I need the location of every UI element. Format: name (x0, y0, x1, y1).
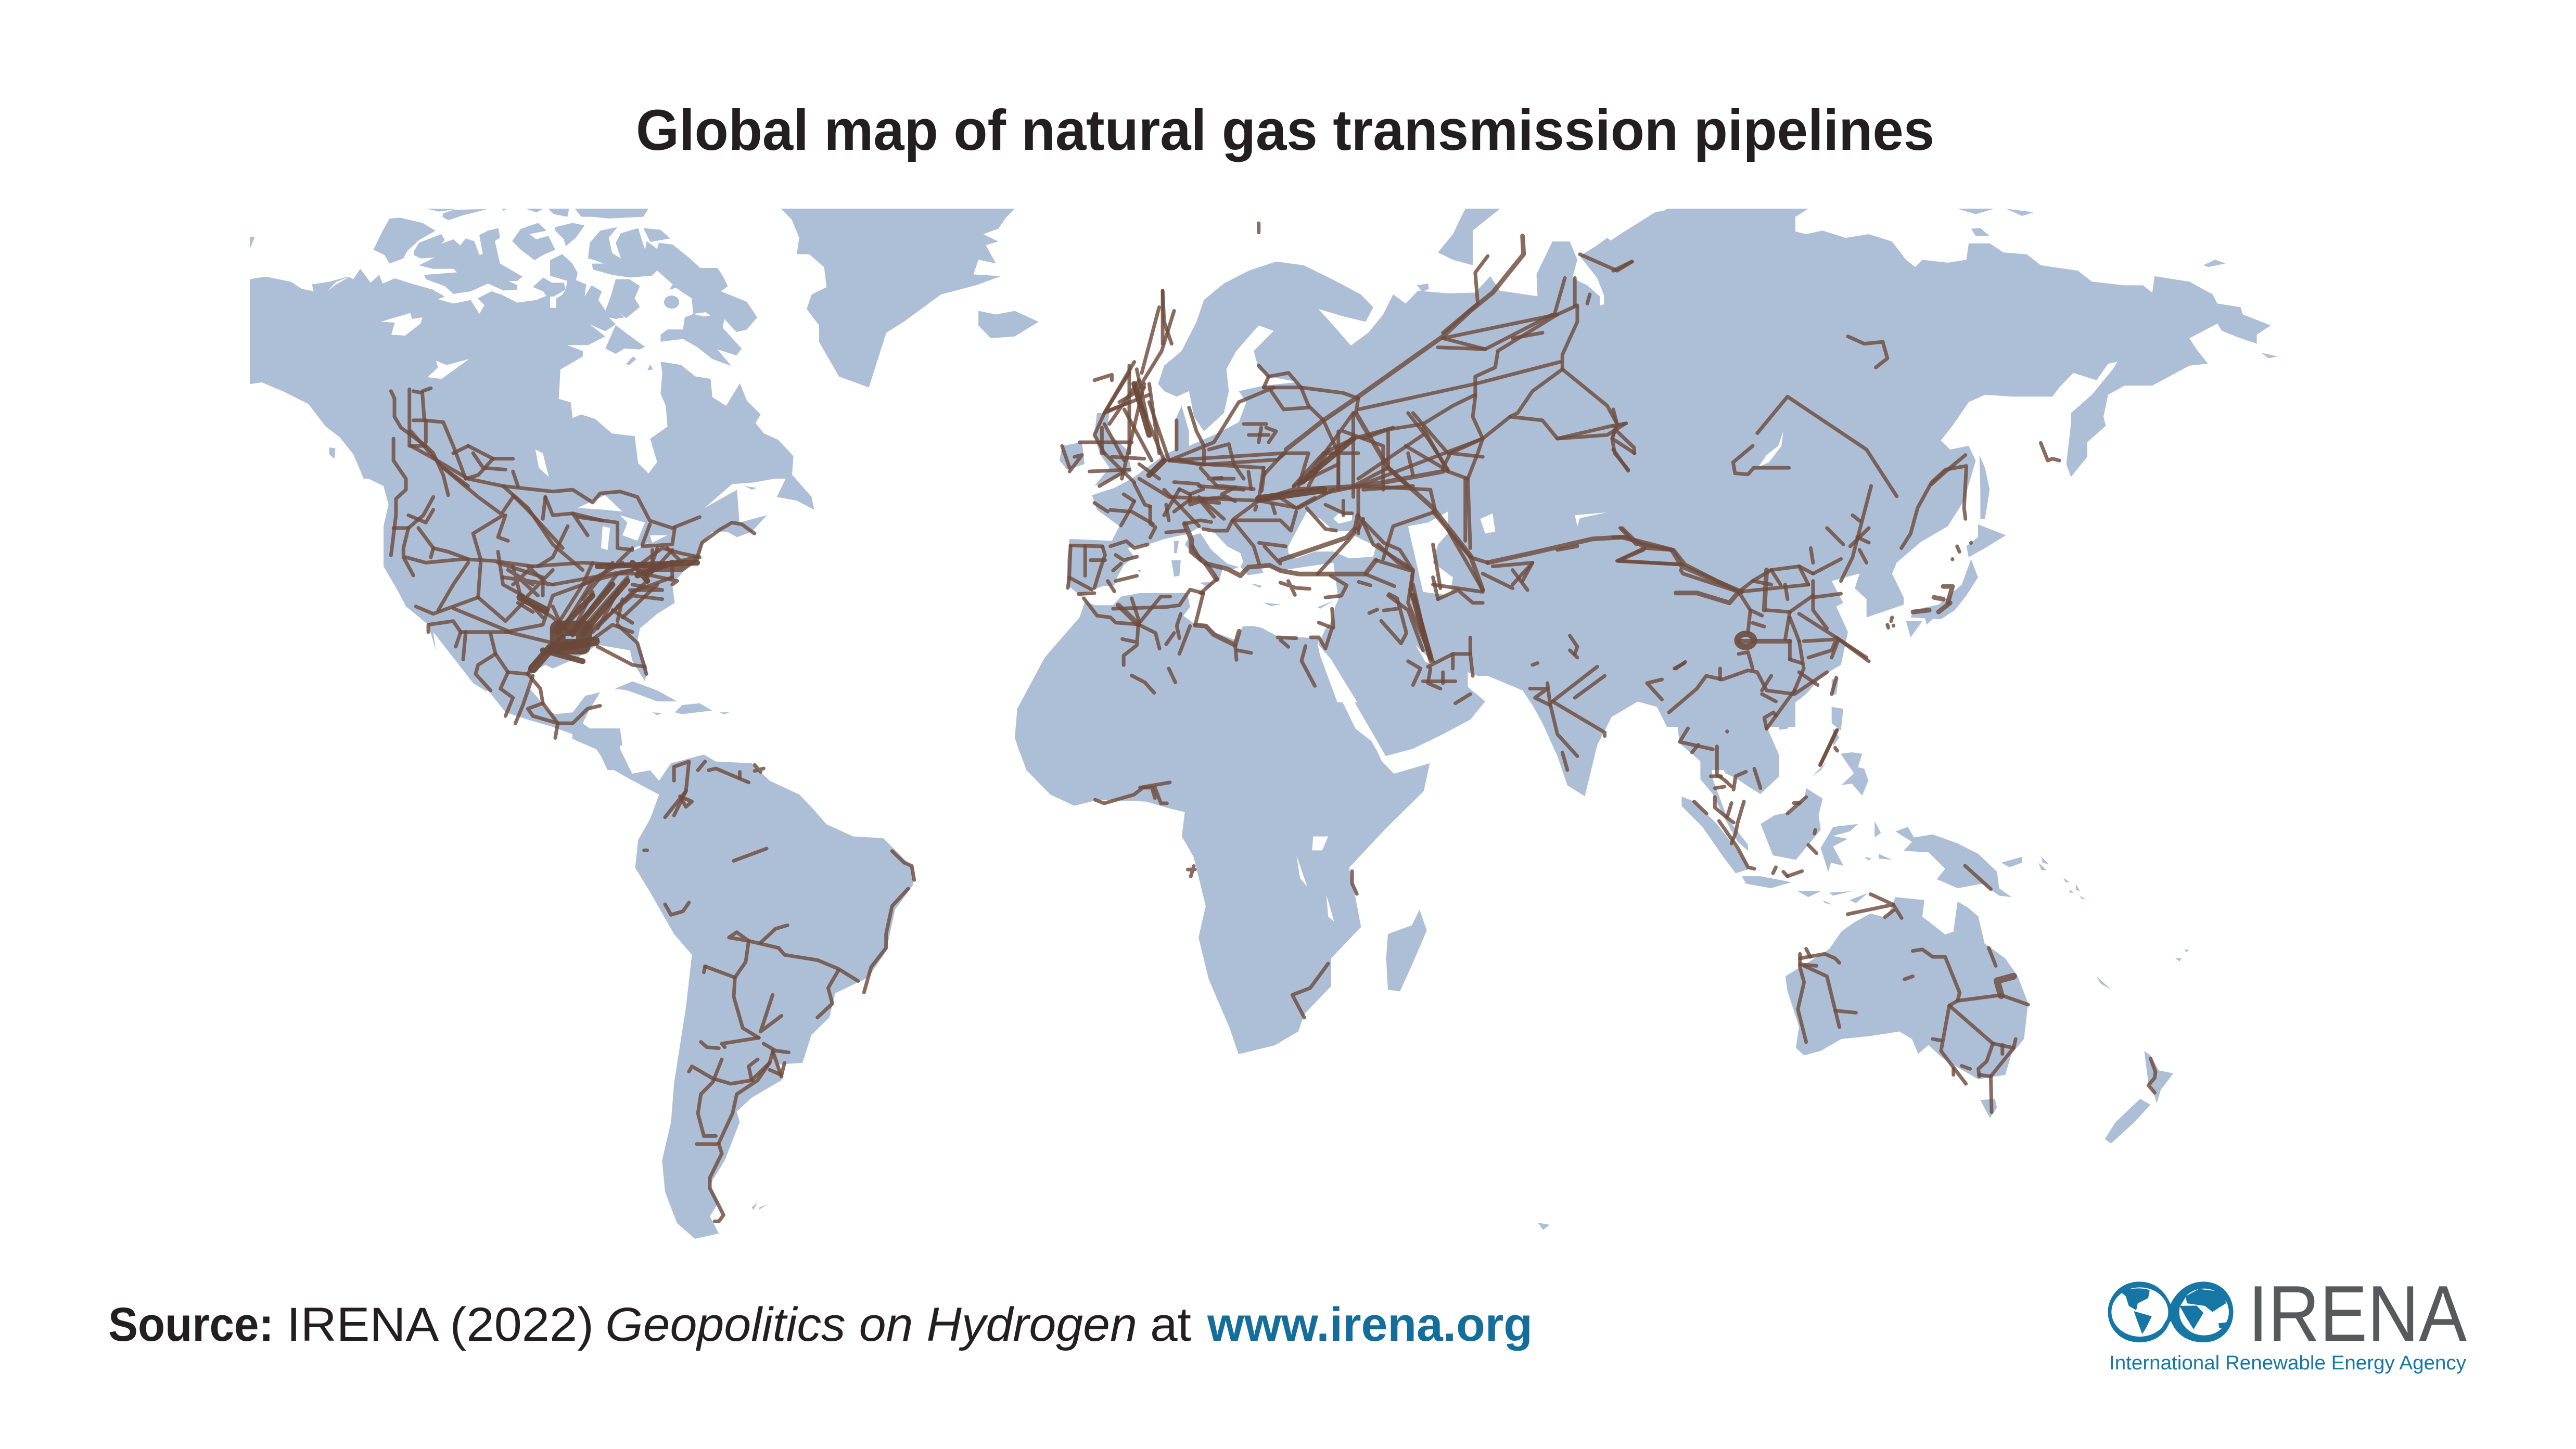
land: Italy, Sicily, Sardinia, Corsica, Crete, Cyprus (1138, 533, 1333, 609)
citation author: IRENA (2022) (287, 1298, 594, 1351)
pipelines: Iberia, France, Italy, Balkans, Turkey, North Africa, Levant (1068, 453, 1413, 693)
website link: www.irena.org (1207, 1298, 1533, 1351)
pipelines: South-East Asia and Oceania (1680, 728, 2156, 1112)
icon: infinity globe emblem (2108, 1281, 2234, 1342)
seas and lakes: Canada (327, 258, 469, 379)
citation at: at (1150, 1298, 1191, 1351)
land: southern North America and Greenland (361, 209, 1039, 770)
seas and lakes: Caspian, Aral, Balkhash, Persian Gulf (1386, 511, 1607, 767)
pipelines: South America and Sub-Saharan Africa (644, 762, 1357, 1221)
land: South Sandwich islet (1538, 1223, 1550, 1230)
seas and lakes: USA and Gulf of California (433, 450, 667, 698)
title: Global map of natural gas transmission pipelines (636, 98, 1934, 162)
citation title: Geopolitics on Hydrogen (605, 1298, 1137, 1351)
pipelines: North America (391, 388, 755, 738)
seas: Mediterranean, Black Sea, Red Sea (1081, 511, 1376, 702)
land: South-East Asia and Oceania (1678, 727, 2189, 1144)
seas and lakes: Lake Baikal (1758, 431, 1783, 467)
land: Eastern Asia and Siberia (1604, 209, 2278, 770)
seas and lakes: African great lakes (1296, 837, 1334, 922)
pipelines: China, Russia Far East, Japan (1613, 262, 2059, 765)
world map (250, 209, 2278, 1239)
land: South America, Southern Africa, Madagascar (572, 728, 1430, 1239)
pipelines: Europe, Middle East, Central Asia (1062, 223, 1742, 770)
pipelines: dense cores, Gulf Coast and Appalachia (520, 563, 697, 669)
IRENA logo (2108, 1270, 2467, 1374)
pipelines: dense corridors, North Sea, Ukraine, Gulf (1134, 384, 1431, 658)
logo wordmark: IRENA (2248, 1270, 2467, 1358)
source label: Source: (108, 1298, 274, 1351)
logo tagline: International Renewable Energy Agency (2109, 1352, 2466, 1374)
source line (108, 1298, 1533, 1351)
seas: lower Red Sea (1353, 709, 1386, 756)
land: Canada and Arctic archipelago (250, 209, 794, 479)
land: Europe, Western and South Asia, North Africa (1015, 209, 1795, 796)
